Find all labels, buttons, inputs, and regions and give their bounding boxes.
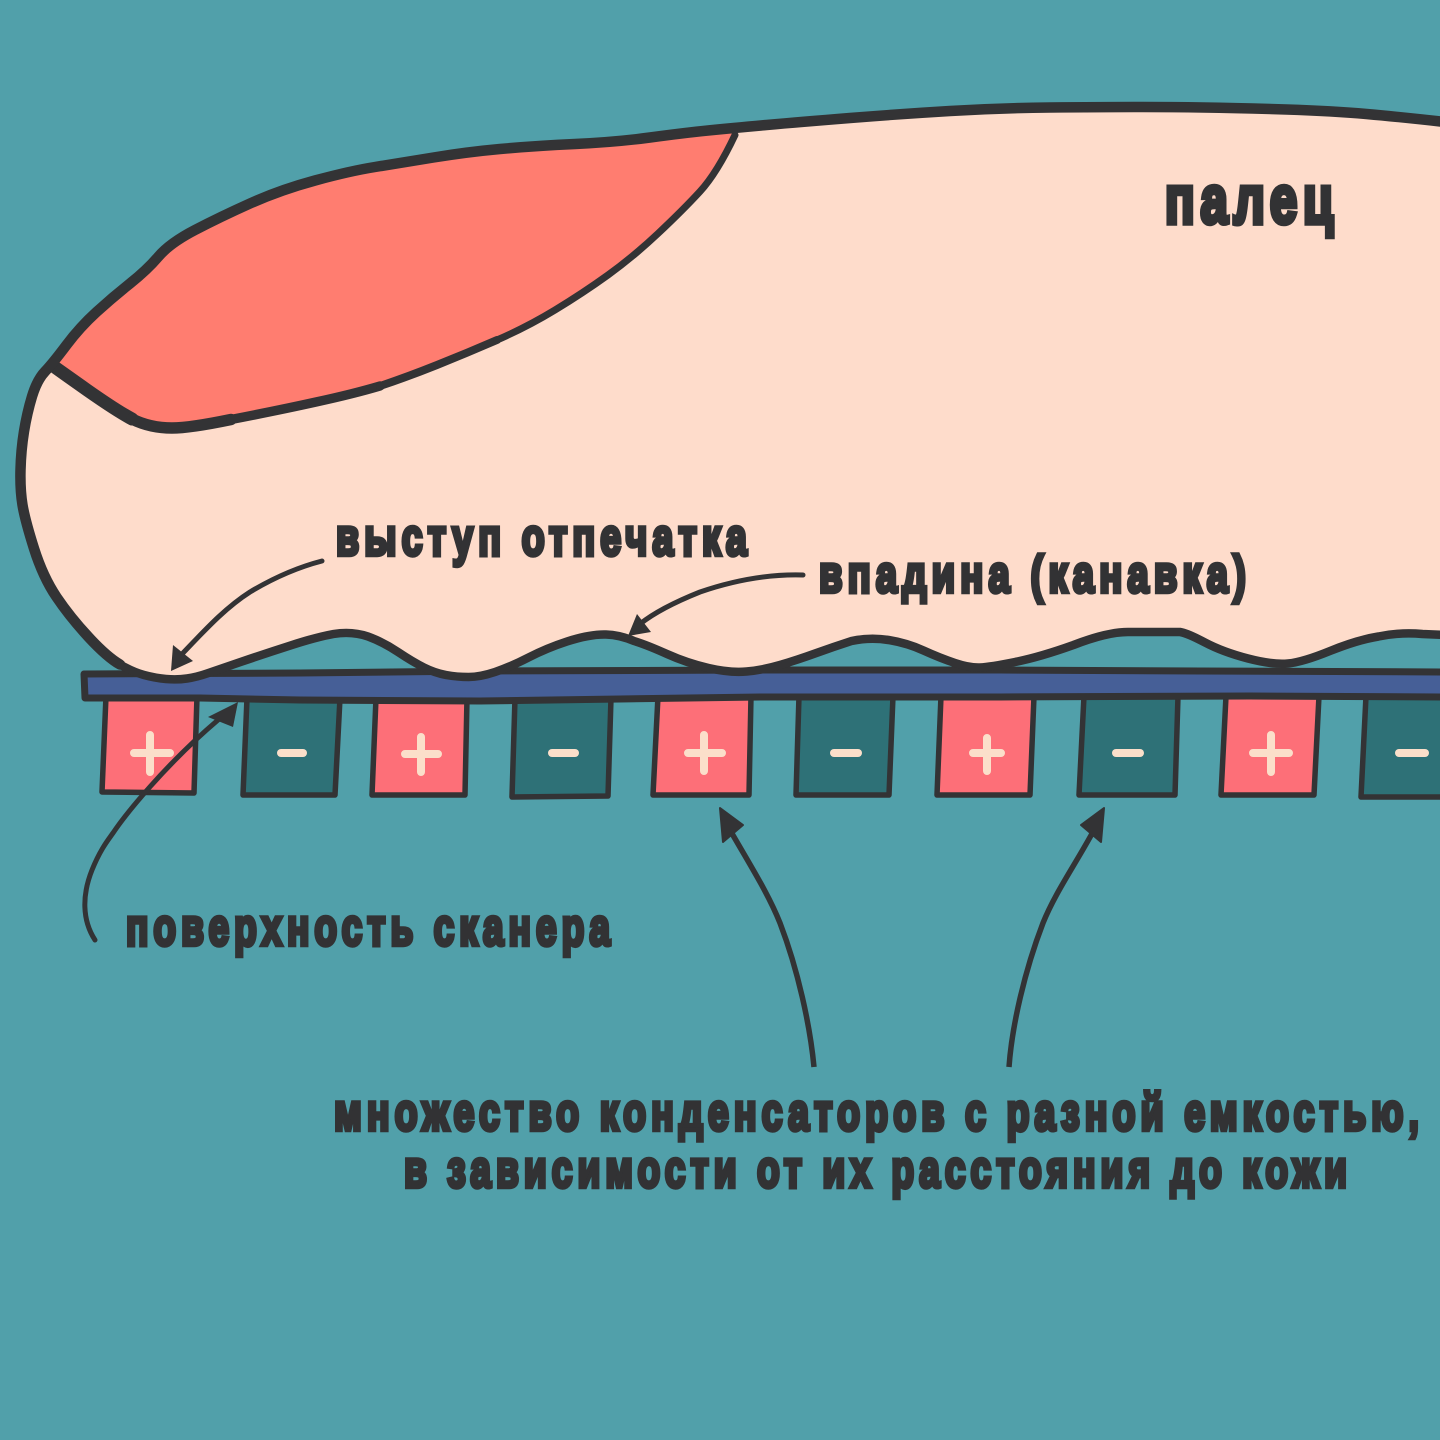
capacitor plus 5: [1221, 696, 1319, 795]
arrow: scanner surface: [85, 702, 238, 940]
capacitor minus 1: [243, 698, 340, 795]
capacitor plus 4: [937, 696, 1034, 795]
arrow: capacitor left: [720, 808, 814, 1067]
capacitors row: [102, 696, 1440, 797]
capacitor plus 2: [372, 698, 467, 795]
label: finger: палец: [1165, 162, 1339, 238]
finger outline: top and left: [20, 107, 1440, 664]
capacitor minus 4: [1079, 696, 1178, 795]
label: valley: впадина (канавка): [819, 546, 1251, 604]
arrow: valley: [628, 575, 803, 636]
label: scanner surface: поверхность сканера: [126, 899, 615, 957]
label: capacitors: [334, 1084, 1424, 1199]
arrow: ridge: [171, 561, 322, 671]
finger outline: ridges and valleys: [120, 632, 1440, 679]
finger: [20, 107, 1440, 679]
fingernail outline: [56, 135, 735, 428]
capacitor plus 1: [102, 696, 197, 793]
capacitor plus 3: [653, 696, 751, 795]
capacitor minus 3: [796, 696, 893, 795]
arrow: capacitor right: [1009, 808, 1104, 1067]
scanner surface: [84, 670, 1440, 701]
capacitor minus 5: [1361, 696, 1440, 797]
label: ridge: выступ отпечатка: [336, 509, 752, 567]
capacitor minus 2: [512, 698, 611, 797]
fingernail: [56, 130, 735, 428]
